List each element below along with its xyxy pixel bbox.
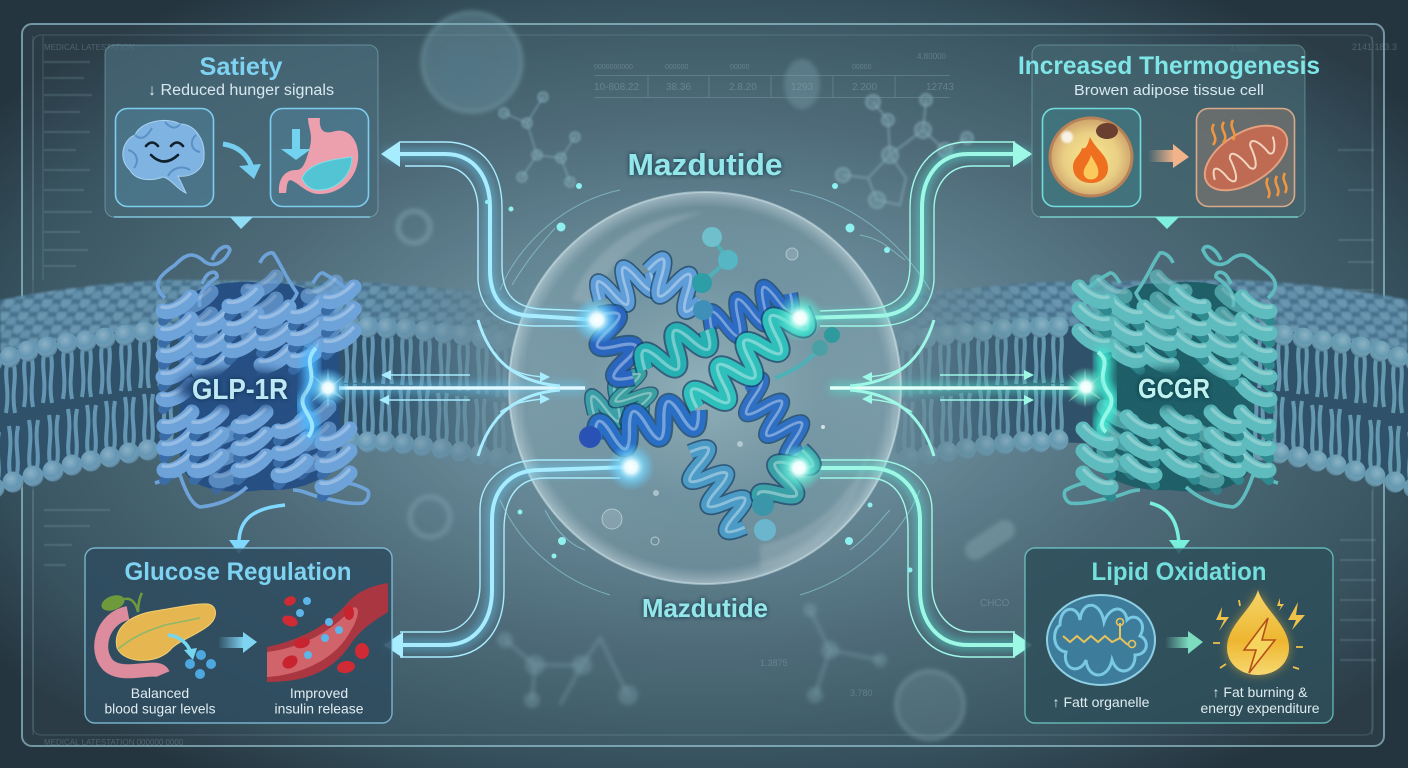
- faint background data table: 000000: [665, 64, 688, 71]
- faint background data table: 4.80000: [917, 52, 946, 61]
- right flow arrowheads: [862, 141, 1034, 658]
- arrow: brain to stomach: [223, 144, 261, 179]
- faint side data panels: 3.780: [850, 688, 873, 698]
- arrow: pancreas to vessel: [218, 632, 257, 653]
- tile: stomach: [270, 108, 368, 206]
- binding glow: GLP-1R: [302, 348, 348, 437]
- faint side data panels: 4.50000: [1230, 45, 1259, 54]
- heading: lipid oxidation: Lipid Oxidation: [1092, 558, 1266, 586]
- connector: thermogenesis to GCGR: [1155, 217, 1179, 248]
- left flow arrowheads: [379, 141, 550, 658]
- left flow lines glow: [328, 154, 631, 645]
- arrow: cell to mitochondrion: [1148, 144, 1189, 168]
- panel: lipid oxidation: [1025, 548, 1333, 723]
- arrow: organelle to drop: [1165, 631, 1203, 654]
- icon: pancreas: [99, 592, 216, 679]
- text: improved insulin release: insulin release: [274, 700, 364, 716]
- tile: mitochondrion: [1194, 108, 1298, 206]
- central bubble: [509, 192, 901, 584]
- right flow lines glow: [799, 154, 1085, 645]
- faint background data table: 10-808.22: [594, 82, 639, 93]
- panel: satiety: [105, 45, 378, 217]
- faint background data table: 00000: [730, 64, 750, 71]
- right cell membrane: [868, 280, 1408, 498]
- faint side data panels: CHCO: [980, 598, 1010, 609]
- text: fat burning: ↑ Fat burning &: [1212, 684, 1308, 700]
- title: mazdutide top: Mazdutide: [628, 147, 782, 182]
- text: balanced blood sugar levels: blood sugar levels: [104, 700, 216, 716]
- heading: increased thermogenesis: Increased Thermogenesis: [1018, 52, 1320, 80]
- receptor label: GLP-1R: [178, 368, 302, 408]
- connector: satiety to GLP-1R: [230, 217, 253, 248]
- faint molecule top right: [836, 94, 973, 208]
- text: improved insulin release: Improved: [290, 685, 348, 701]
- receptor label: GLP-1R: GLP-1R: [192, 374, 288, 406]
- receptor: GLP-1R: [155, 247, 369, 507]
- text: brown adipose: Browen adipose tissue cell: [1074, 82, 1264, 99]
- left flow lines: [328, 142, 631, 657]
- faint side data panels: MEDICAL LATESTATION: [44, 43, 135, 52]
- heading: glucose regulation: Glucose Regulation: [124, 558, 352, 586]
- faint background data table: 0000000000: [594, 64, 633, 71]
- receptor: GCGR: [1064, 247, 1278, 507]
- icon: blood vessel: [267, 583, 388, 682]
- panel: glucose regulation: [85, 548, 392, 723]
- connector: GCGR to lipid: [1150, 503, 1190, 554]
- receptor label: GCGR: GCGR: [1138, 373, 1210, 404]
- faint molecule top left: [499, 92, 580, 187]
- binding nodes: [573, 294, 824, 492]
- tile: brain: [116, 108, 214, 206]
- faint background blobs and molecules: [398, 59, 1005, 739]
- text: fat burning: energy expenditure: [1200, 700, 1320, 716]
- faint background data table: 00000: [852, 64, 872, 71]
- tile: adipose cell: [1042, 108, 1140, 206]
- faint background data table: 2.200: [852, 82, 877, 93]
- orbiting arcs and particles: [485, 183, 930, 595]
- icon: energy drop: [1213, 590, 1305, 675]
- heading: satiety: Satiety: [200, 53, 283, 81]
- text: reduced hunger signals: ↓ Reduced hunger signals: [148, 82, 334, 99]
- label: mazdutide bottom: Mazdutide: [642, 593, 768, 623]
- faint side data panels: 2141 183.3: [1352, 42, 1397, 52]
- receptor label: GCGR: [1126, 368, 1222, 408]
- faint background cell top: [422, 12, 522, 112]
- left cell membrane: [0, 280, 540, 498]
- faint background data table: [594, 52, 954, 98]
- faint background data table: 1293: [791, 82, 814, 93]
- connector: GLP-1R to glucose: [229, 505, 285, 554]
- faint background data table: 38.36: [666, 82, 691, 93]
- text: balanced blood sugar levels: Balanced: [131, 685, 189, 701]
- icon: fat organelle: [1047, 595, 1155, 685]
- faint side data panels: MEDICAL LATESTATION 000000 0000: [44, 738, 184, 747]
- right flow lines: [799, 142, 1085, 657]
- binding glow: GCGR: [1066, 352, 1112, 432]
- faint background data table: 12743: [926, 82, 954, 93]
- peptide: mazdutide helices: [579, 227, 840, 541]
- faint background data table: 2.8.20: [729, 82, 757, 93]
- panel: increased thermogenesis: [1018, 45, 1320, 217]
- text: fat organelle: ↑ Fatt organelle: [1052, 694, 1150, 710]
- faint side data panels: 1.3875: [760, 658, 788, 668]
